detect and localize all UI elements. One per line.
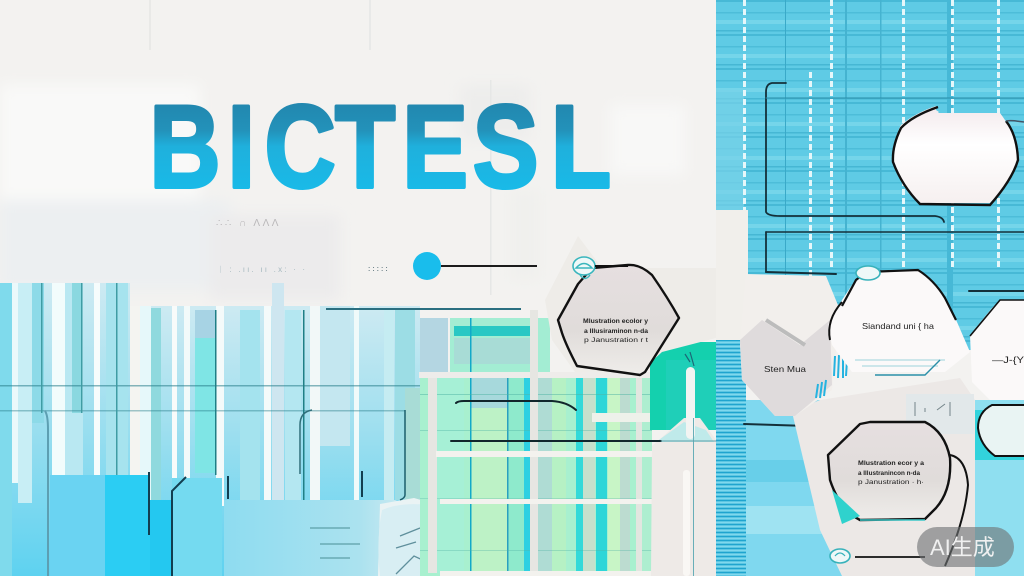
panel: hexagon callout 3 (828, 270, 970, 375)
panel: right cyan striped grid (716, 0, 1024, 350)
text: faded caption row: ᛁ : .ıı. ıı .x: · · (218, 265, 307, 274)
text: hexagon 4 label: —J-{Y (992, 355, 1024, 365)
panel: small data box (906, 394, 974, 434)
panel: white backing behind hexagon 1 (545, 236, 716, 372)
panel: hexagon callout 2 (740, 274, 847, 416)
text: hexagon 1 body (583, 318, 648, 344)
text: rounded callout body: Mlustration ecor y a (858, 460, 924, 467)
badge: AI generated (917, 527, 1014, 567)
text: hexagon 3 label: Siandand uni { ha (862, 321, 934, 331)
panel: green grid (419, 310, 716, 576)
text: hexagon 1 body: p Janustration r t (584, 337, 648, 344)
text: rounded callout body (858, 460, 924, 486)
icon: lower badge and line (830, 549, 925, 563)
text: faded caption row: ∴∴ ∩ ΛΛΛ (216, 218, 281, 229)
panel: lower left vertical striped bars (0, 283, 521, 576)
dot and connector line (413, 252, 628, 280)
text: rounded callout body: a Illustranincon n-da (858, 470, 920, 477)
panel: bright cyan block (50, 410, 405, 576)
connector lines in green grid (451, 401, 716, 441)
title: BICTESL (150, 81, 611, 212)
panel: pale shape behind lower callout (792, 378, 975, 576)
icon: hexagon 1 badge (573, 257, 595, 278)
text: faded caption row: ::::: (368, 266, 390, 273)
panel: rounded callout (828, 422, 968, 566)
icon: cyan stripes (816, 355, 847, 398)
connector lines right (744, 83, 1024, 427)
panel: faint ghost blocks behind title (0, 85, 685, 300)
panel: hexagon callout 4 (970, 300, 1024, 400)
text: hexagon 2 label: Sten Mua (764, 364, 806, 374)
arrow: pale vertical post and house roof (651, 352, 716, 576)
text: faded caption row (216, 218, 390, 274)
panel: top right blob (893, 106, 1024, 205)
text: hexagon 1 body: a Illusiraminon n-da (584, 328, 648, 335)
badge: AI generated: AI生成 (930, 535, 995, 560)
panel: open book shape (224, 498, 442, 576)
panel: hexagon callout 1 (558, 265, 679, 375)
panel: faint rules (149, 0, 492, 295)
icon: hexagon 3 badge (856, 266, 880, 280)
text: hexagon 1 body: Mlustration ecolor y (583, 318, 648, 325)
panel: lower right cyan grid (716, 340, 1024, 576)
panel: rounded callout right edge (978, 405, 1024, 456)
text: rounded callout body: p Janustration · h· (858, 479, 924, 486)
